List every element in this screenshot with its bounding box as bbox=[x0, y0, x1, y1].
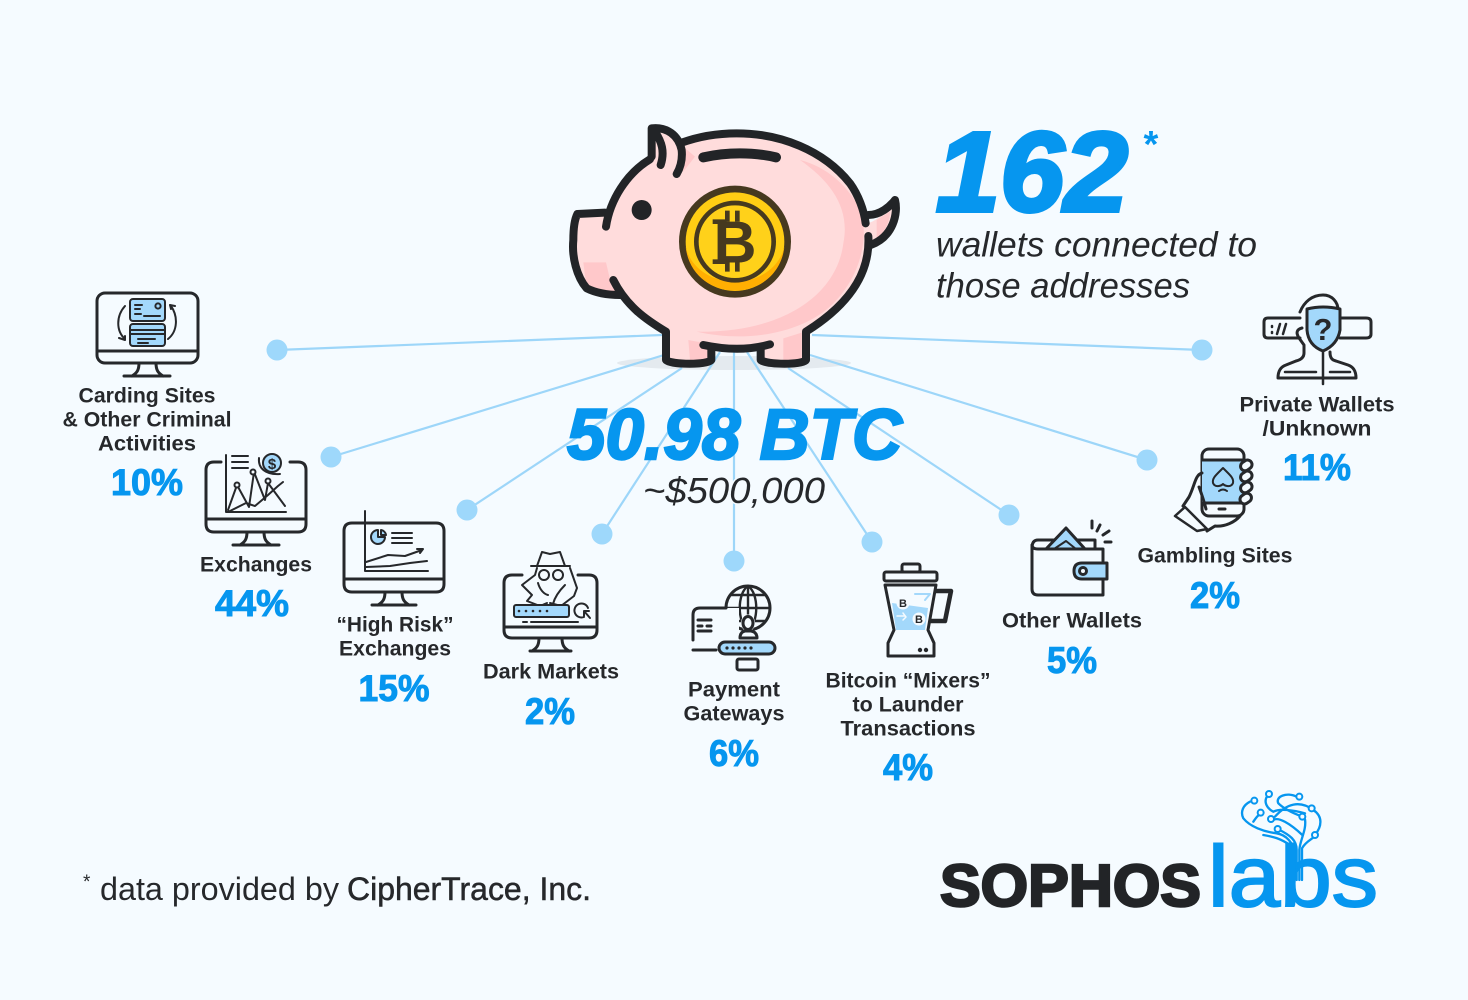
percentage: 4% bbox=[883, 747, 933, 788]
logo: SophosLabs bbox=[940, 791, 1378, 925]
percentage: 2% bbox=[1190, 575, 1240, 616]
percentage: 44% bbox=[215, 583, 289, 624]
icon: circuit brain bbox=[1242, 791, 1320, 880]
item: other wallets bbox=[1002, 521, 1142, 681]
headline: total BTC: 50.98 BTC bbox=[567, 396, 904, 475]
icon: monitor with trading chart bbox=[206, 454, 306, 545]
label: Activities bbox=[98, 432, 196, 455]
icon: piggy bank with bitcoin bbox=[572, 127, 896, 364]
footnote: CipherTrace, Inc. bbox=[347, 871, 591, 907]
icon: monitor with hacker bbox=[504, 552, 597, 651]
label: Other Wallets bbox=[1002, 609, 1142, 632]
percentage: 6% bbox=[709, 733, 759, 774]
percentage: 2% bbox=[525, 691, 575, 732]
label: Dark Markets bbox=[483, 660, 619, 683]
label: Exchanges bbox=[339, 637, 451, 660]
icon: person behind shield with question mark bbox=[1264, 295, 1371, 384]
headline: 162 wallets: 162 bbox=[936, 109, 1128, 235]
connector lines and dots bbox=[266, 335, 1212, 572]
icon: blender with coins bbox=[884, 564, 951, 656]
wordmark: labs: labs bbox=[1208, 829, 1378, 925]
percentage: 10% bbox=[111, 462, 183, 503]
subtitle: those addresses bbox=[936, 266, 1190, 306]
icon: hand holding phone bbox=[1175, 449, 1254, 531]
icon: monitor with line chart bbox=[344, 511, 444, 605]
label: & Other Criminal bbox=[62, 408, 232, 431]
icon: blender with coins: B bbox=[915, 614, 923, 626]
label: /Unknown bbox=[1262, 417, 1372, 440]
headline: 162 wallets bbox=[936, 109, 1257, 306]
icon: monitor with trading chart: $ bbox=[268, 456, 277, 473]
item: payment gateways bbox=[684, 586, 784, 774]
percentage: 11% bbox=[1283, 447, 1351, 488]
item: gambling sites bbox=[1138, 449, 1292, 616]
asterisk: * bbox=[1142, 124, 1159, 166]
icon: monitor with credit cards bbox=[97, 293, 198, 376]
icon: piggy bank with bitcoin: B bbox=[714, 209, 756, 276]
pig shadow bbox=[617, 356, 851, 370]
label: Transactions bbox=[840, 717, 976, 740]
label: Gambling Sites bbox=[1138, 544, 1292, 567]
icon: wallet with banknote bbox=[1032, 521, 1111, 595]
icon: globe, card and password field bbox=[693, 586, 775, 670]
footnote: data provided by bbox=[100, 871, 339, 907]
percentage: 15% bbox=[358, 668, 430, 709]
label: “High Risk” bbox=[336, 613, 454, 636]
label: Bitcoin “Mixers” bbox=[826, 669, 990, 692]
item: private wallets: ? bbox=[1314, 312, 1332, 347]
item: dark markets bbox=[483, 552, 619, 732]
item: carding sites bbox=[62, 293, 232, 503]
label: Private Wallets bbox=[1240, 393, 1394, 416]
item: private wallets bbox=[1240, 295, 1394, 488]
item: high risk exchanges bbox=[336, 511, 454, 709]
item: exchanges bbox=[200, 454, 312, 624]
label: Gateways bbox=[684, 702, 784, 725]
icon: blender with coins: B bbox=[899, 598, 907, 610]
footnote: * bbox=[83, 872, 91, 893]
headline: total BTC bbox=[567, 396, 904, 511]
label: Payment bbox=[688, 678, 780, 701]
subtitle: wallets connected to bbox=[936, 226, 1257, 264]
footnote bbox=[83, 871, 591, 907]
item: bitcoin mixers bbox=[826, 564, 990, 788]
label: to Launder bbox=[852, 693, 964, 716]
percentage: 5% bbox=[1047, 640, 1097, 681]
wordmark: SOPHOS: SOPHOS bbox=[940, 853, 1201, 919]
label: Exchanges bbox=[200, 553, 312, 576]
dollar value: ~$500,000 bbox=[643, 470, 825, 511]
label: Carding Sites bbox=[78, 384, 216, 407]
